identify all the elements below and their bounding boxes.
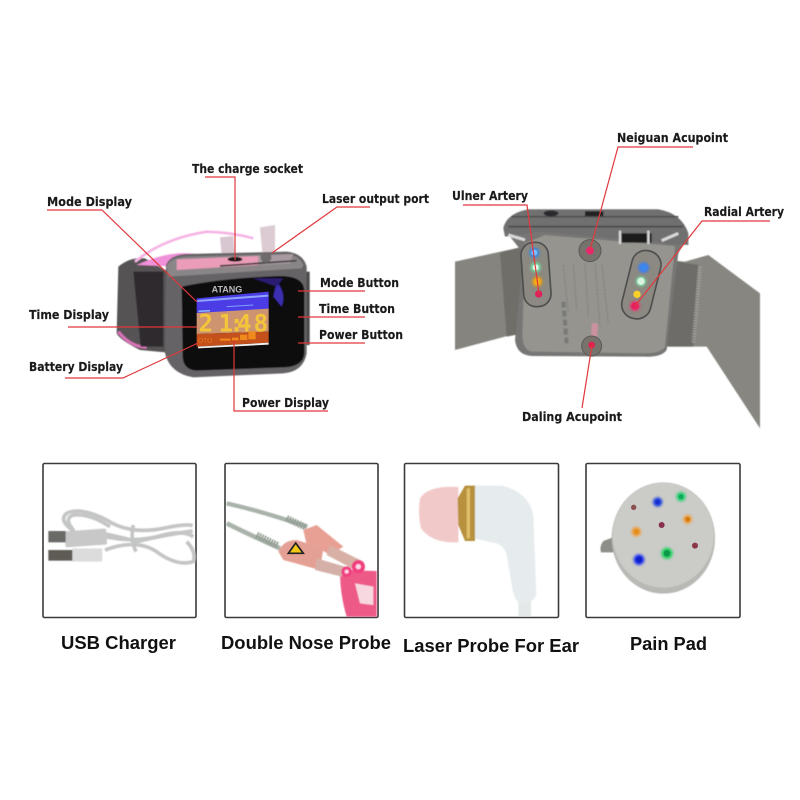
LCD screen: OTO — [198, 337, 212, 344]
label: pain pad: Pain Pad — [630, 634, 707, 654]
printed fine text — [563, 263, 608, 327]
right LED pad — [619, 247, 664, 322]
leader lines: rear watch — [463, 147, 770, 408]
rear watch device — [455, 209, 760, 428]
label: USB charger: USB Charger — [61, 633, 176, 653]
watch strap — [117, 258, 177, 353]
left strap — [455, 247, 523, 350]
laser cable stub — [260, 225, 275, 257]
label: laser output port: Laser output port — [322, 192, 429, 206]
panel: double nose probe — [225, 464, 378, 618]
top acupoint LED — [579, 240, 601, 262]
panel: USB charger — [43, 464, 196, 618]
label: double nose probe: Double Nose Probe — [221, 633, 391, 653]
right strap edge — [302, 272, 310, 345]
left LED pad — [520, 241, 552, 308]
label: laser probe for ear: Laser Probe For Ear — [403, 636, 579, 656]
brand logo: ATANG — [212, 284, 242, 294]
panel: pain pad — [586, 464, 740, 618]
LCD screen — [197, 292, 269, 348]
front watch device — [117, 225, 310, 377]
pink glow around strap — [135, 232, 253, 262]
label: time display: Time Display — [29, 308, 109, 322]
black face — [182, 276, 304, 371]
icon: USB cable — [48, 511, 194, 563]
case — [503, 209, 688, 357]
watch body — [165, 252, 307, 377]
label: battery display: Battery Display — [29, 360, 123, 374]
label: daling acupoint: Daling Acupoint — [522, 410, 622, 424]
leader lines: front watch — [47, 177, 370, 411]
label: ulner artery: Ulner Artery — [452, 189, 528, 203]
label: neiguan acupoint: Neiguan Acupoint — [617, 131, 728, 145]
icon: ear probe — [419, 486, 536, 616]
label: radial artery: Radial Artery — [704, 205, 784, 219]
label: the charge socket: The charge socket — [192, 162, 303, 176]
label: power button: Power Button — [319, 328, 403, 342]
label: mode display: Mode Display — [47, 195, 132, 209]
bottom acupoint LED — [582, 336, 602, 356]
warning label — [288, 543, 303, 553]
right strap — [662, 255, 760, 428]
icon: nose probe — [227, 503, 377, 617]
label: time button: Time Button — [319, 302, 395, 316]
charge cable stub — [220, 236, 235, 258]
panel: laser probe for ear — [404, 464, 558, 618]
LCD screen: 21:48 — [199, 309, 268, 337]
label: mode button: Mode Button — [320, 276, 399, 290]
label: power display: Power Display — [242, 396, 329, 410]
icon: pain pad — [600, 482, 715, 594]
